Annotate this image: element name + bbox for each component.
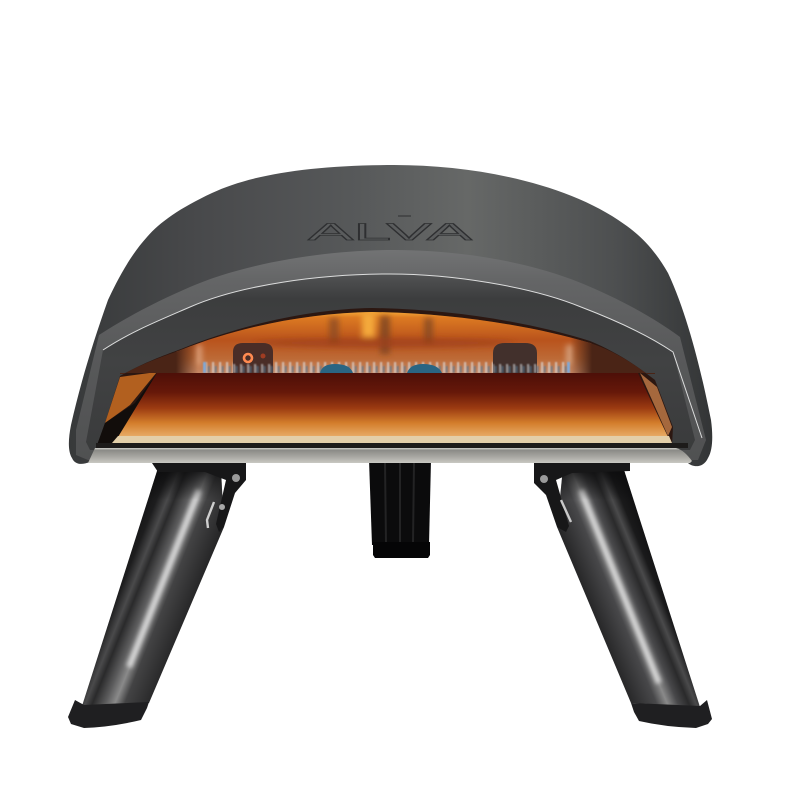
- embossed ALVA logo: ALVA: [308, 219, 472, 246]
- leg tube: [557, 471, 700, 706]
- oven dome shell: [69, 165, 712, 466]
- stainless steel lip: [88, 448, 692, 463]
- stone front edge: [112, 436, 672, 443]
- inner door frame: [86, 274, 695, 450]
- left front leg: [68, 460, 246, 728]
- left inner wall glow: [105, 372, 157, 423]
- burner flame jets: [206, 360, 568, 373]
- end blue flames: [203, 362, 206, 373]
- highlight line on frame: [103, 274, 702, 438]
- black wedge at left of stone: [97, 373, 157, 445]
- oven opening: [97, 308, 673, 446]
- pizza stone: [118, 373, 668, 437]
- mounting bracket: [534, 463, 630, 532]
- left sensor plate: [233, 343, 273, 373]
- right inner wall glow: [640, 373, 672, 436]
- mounting bracket: [152, 463, 246, 532]
- fire-lit back wall with flames: [120, 312, 660, 374]
- wall side fade: [176, 344, 196, 373]
- right front leg: [534, 460, 712, 728]
- foot: [68, 700, 149, 728]
- leg tube: [82, 470, 224, 705]
- centre burner caps: [320, 364, 353, 373]
- back centre leg: [369, 460, 431, 558]
- right sensor plate: [493, 343, 537, 373]
- foot: [631, 700, 712, 728]
- dark gap below stone: [96, 443, 688, 448]
- illustration: gas pizza oven on three legs: [68, 165, 712, 728]
- arched front band: [76, 250, 706, 460]
- flame streaks: [196, 313, 573, 365]
